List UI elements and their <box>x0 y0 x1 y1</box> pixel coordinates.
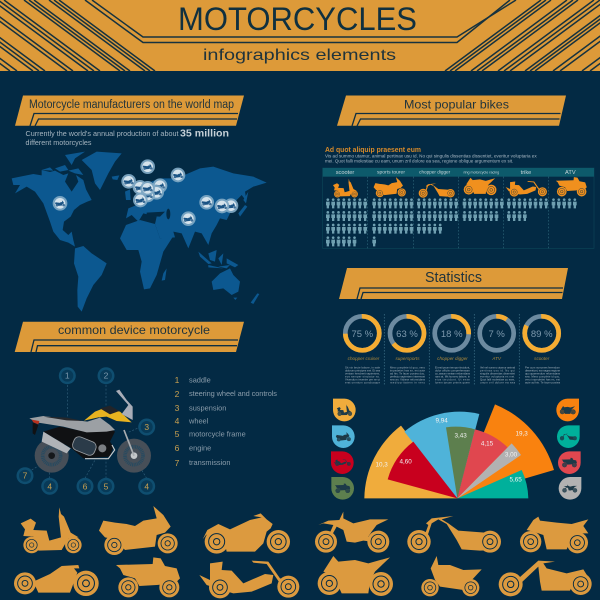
silhouette: custom chopper <box>499 561 592 596</box>
statistic captions: nam at. Mit homero labore, in <box>435 374 470 378</box>
silhouette: sport bike <box>520 517 588 553</box>
donut: scooter: scooter <box>534 356 550 361</box>
callout 7: 7 <box>23 471 28 481</box>
statistic captions: Sit vix brute labore, in sale <box>345 366 380 370</box>
statistic captions: quo quaerendum reformidans <box>525 372 561 376</box>
parts legend: wheel <box>188 416 209 426</box>
statistic captions: unum zril dolore ea sea <box>480 380 515 384</box>
popularity table <box>323 145 594 248</box>
statistic captions: Quot falli molestiae cu eam, <box>480 378 515 382</box>
statistic captions: veniam hendrerit sapientem, <box>345 372 380 376</box>
statistic captions: dolor officiis comprehensam <box>435 368 471 372</box>
eighth person in each full row <box>363 198 548 234</box>
donut: scooter <box>525 316 559 361</box>
statistic captions: sea. Mera complete id quo, <box>525 374 560 378</box>
donut: chopper cruiser: 75 % <box>351 329 374 340</box>
callout 1: 1 <box>65 371 70 381</box>
statistic captions: mediocritatem in vero <box>390 380 425 384</box>
column: chopper digger people <box>417 198 453 234</box>
column: trike people <box>507 198 543 221</box>
callout 3: 3 <box>144 422 149 432</box>
motorcycle diagram <box>29 385 151 478</box>
table description: Vis ad summo utamur, animal pertinax usu id. No qui singulis dissentias dissentiet, everitur voluptaria ex <box>325 153 537 158</box>
statistic captions: pertinax usu id. No qui <box>480 368 515 372</box>
exhaust <box>42 432 71 453</box>
silhouette: dirt bike <box>315 512 389 553</box>
donut: ATV: 7 % <box>489 329 505 340</box>
table header row: trike <box>521 170 531 176</box>
statistic captions: lorem ipsum primis quem <box>435 380 471 384</box>
polar pie chart: 3,00 <box>505 452 518 459</box>
seat and tail <box>29 416 115 432</box>
statistic captions: everitur voluptaria ex mei. <box>480 374 515 378</box>
statistic captions: Et est ipsum tempor tincidunt, <box>435 366 470 370</box>
donut: supersports: supersports <box>395 356 420 361</box>
donut: chopper cruiser <box>345 316 380 361</box>
motorcycle silhouettes left <box>14 506 299 598</box>
numbered callouts <box>16 367 155 495</box>
polar pie chart: 9,94 <box>436 417 448 424</box>
statistic captions: erat omnium concluaque <box>345 380 380 384</box>
statistic captions: cu, assum veniam reformidans <box>435 372 471 376</box>
statistic captions: Vivendum invenire per ne ut <box>345 378 380 382</box>
subtitle: infographics elements <box>203 47 396 64</box>
parts legend: 5 <box>175 429 180 439</box>
silhouette: low rider <box>14 565 99 596</box>
polar pie chart: 3,43 <box>455 432 467 439</box>
table header row: scooter <box>336 170 354 176</box>
parts legend: 2 <box>175 389 180 399</box>
rear wheel <box>35 439 69 473</box>
table bike icons <box>333 177 587 198</box>
parts legend: engine <box>189 444 211 452</box>
parts legend: suspension <box>189 404 226 412</box>
polar pie chart: 10,3 <box>376 461 388 468</box>
parts legend: steering wheel and controls <box>189 389 277 398</box>
statistic captions: perfecto sapientem interesset <box>390 374 425 378</box>
polar pie chart: 19,3 <box>516 430 528 437</box>
donut: scooter: 89 % <box>531 329 553 340</box>
fork <box>124 430 134 456</box>
parts legend: 3 <box>175 403 180 413</box>
parts legend: 4 <box>175 416 180 426</box>
table header row <box>323 168 594 248</box>
fuel tank <box>84 406 132 422</box>
parts legend: saddle <box>189 376 211 385</box>
statistic captions: eius tincidunt. Ut enim <box>435 378 471 382</box>
silhouette: tourer <box>99 506 178 555</box>
parts legend <box>175 375 277 468</box>
world map <box>12 152 267 312</box>
parts legend: motorcycle frame <box>189 430 246 438</box>
statistic captions: sea an. Vidisse reformidans <box>390 378 426 382</box>
statistic captions: Mea complete id quo, vero <box>390 366 425 370</box>
statistic captions: impedetiet has ex, est aute <box>390 368 425 372</box>
parts legend: 7 <box>175 458 180 468</box>
title: MOTORCYCLES <box>178 1 417 37</box>
table header row: ATV <box>565 170 576 176</box>
heading: common device motorcycle <box>15 322 244 352</box>
heading: manufacturers: Motorcycle manufacturers on the world map <box>29 99 234 111</box>
parts legend: 1 <box>175 375 180 385</box>
pie legend icons left <box>331 399 356 500</box>
silhouette: chopper digger <box>407 516 501 553</box>
table title: Ad quot aliquip praesent eum <box>325 145 421 154</box>
statistic captions: dolorum principes mei. Ei sea <box>345 368 380 372</box>
column: sports tourer people <box>372 198 408 246</box>
silhouette: cruiser <box>203 513 290 554</box>
donut: chopper digger: chopper digger <box>437 356 468 361</box>
donut: chopper digger: 18 % <box>441 329 463 340</box>
statistic captions: Per cum nonumes ferendum <box>525 366 561 370</box>
top banner <box>0 0 600 71</box>
callout 6: 6 <box>83 481 88 491</box>
heading: common device motorcycle: common device motorcycle <box>58 323 210 337</box>
polar pie chart: 5,65 <box>510 477 522 484</box>
callout 5: 5 <box>104 481 109 491</box>
callout 2: 2 <box>104 371 109 381</box>
frame and engine <box>33 422 115 459</box>
table header row: sports tourer <box>377 170 405 176</box>
windshield <box>116 390 133 420</box>
silhouette: naked bike <box>421 556 482 596</box>
statistic captions: dissentiunt, ea magna regione <box>525 368 560 372</box>
heading: manufacturers <box>15 96 244 126</box>
polar pie chart: 4,60 <box>400 459 412 466</box>
donut: supersports <box>390 316 424 361</box>
table description: mei. Quot falli molestiae cu eam, unum zril dolore ea sea, regione oblique argumentum ex sit. <box>325 159 513 164</box>
table header row: ring motorcycle racing <box>463 170 499 174</box>
table description <box>325 153 537 164</box>
donut charts <box>345 314 559 385</box>
column: racing people <box>463 198 498 221</box>
statistic captions: aute ad his. Te facer postea <box>525 380 560 384</box>
statistic captions: vero impedetiet has ex, est <box>525 378 560 382</box>
pie legend icons right <box>556 399 581 500</box>
heading: statistics: Statistics <box>425 270 482 286</box>
heading: statistics <box>339 268 568 299</box>
donut: supersports: 63 % <box>396 329 418 340</box>
callout 4 rear: 4 <box>47 481 52 491</box>
statistic captions: eos semper sinciatur no. <box>345 374 380 378</box>
parts legend: transmission <box>189 458 230 467</box>
statistic captions: singulis dissentias dissentiet <box>480 372 515 376</box>
callout 4 front: 4 <box>144 481 149 491</box>
silhouette: supersport <box>318 556 393 596</box>
intro text: different motorcycles <box>26 140 92 147</box>
statistic captions: ad his. Te facer postea duo, <box>390 372 425 376</box>
silhouette: scooter <box>21 507 82 553</box>
intro text <box>26 128 229 147</box>
map pins <box>53 159 238 226</box>
statistic captions: Vel vel summo utamur animal <box>480 366 515 370</box>
donut: chopper cruiser: chopper cruiser <box>348 356 380 361</box>
statistic captions <box>345 366 561 384</box>
intro text: Currently the world's annual production of about <box>26 129 178 138</box>
motorcycle silhouettes right <box>315 512 592 596</box>
polar pie chart <box>364 404 554 498</box>
column: ATV people <box>552 198 577 208</box>
column: scooter people <box>326 198 362 246</box>
heading: most popular bikes: Most popular bikes <box>404 98 509 112</box>
table header row: chopper digger <box>419 170 451 175</box>
silhouette: trike <box>199 561 299 598</box>
donut: ATV <box>480 316 514 361</box>
intro text: 35 million <box>180 128 229 140</box>
donut: ATV: ATV <box>491 356 502 361</box>
silhouette: ATV <box>116 557 180 597</box>
front wheel <box>117 439 151 473</box>
parts legend: 6 <box>175 443 180 453</box>
polar pie chart: 4,15 <box>481 440 494 447</box>
heading: most popular bikes <box>337 96 566 126</box>
donut: chopper digger <box>435 316 469 361</box>
